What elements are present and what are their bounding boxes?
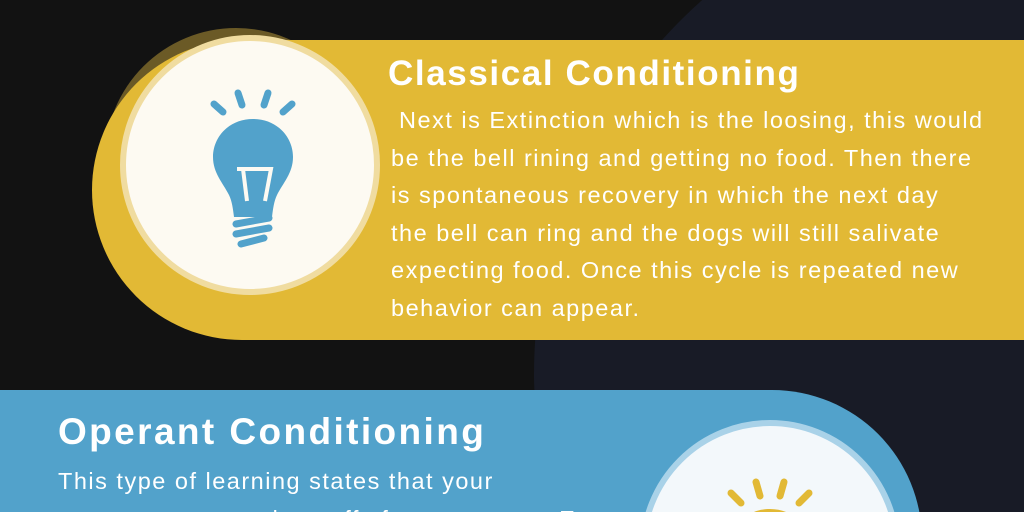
heading: Classical Conditioning xyxy=(388,54,800,93)
icon circle: lightbulb xyxy=(120,35,380,295)
body text: be the bell rining and getting no food. Then there xyxy=(391,145,973,171)
blue panel shape xyxy=(0,390,922,512)
panel: classical conditioning xyxy=(92,28,1024,340)
body text: is spontaneous recovery in which the next day xyxy=(391,182,939,208)
heading: Operant Conditioning xyxy=(58,411,486,452)
yellow panel shape xyxy=(92,40,1024,340)
body text: expecting food. Once this cycle is repeated new xyxy=(391,257,959,283)
body text xyxy=(58,468,576,512)
body text: behavior can appear. xyxy=(391,295,640,321)
icon circle: lightbulb xyxy=(640,420,900,512)
icon shadow xyxy=(105,28,367,290)
body text: This type of learning states that your xyxy=(58,468,494,494)
body text: the bell can ring and the dogs will still salivate xyxy=(391,220,940,246)
body text: Next is Extinction which is the loosing, this would xyxy=(399,107,984,133)
body text xyxy=(391,107,984,321)
panel: operant conditioning xyxy=(0,390,920,512)
